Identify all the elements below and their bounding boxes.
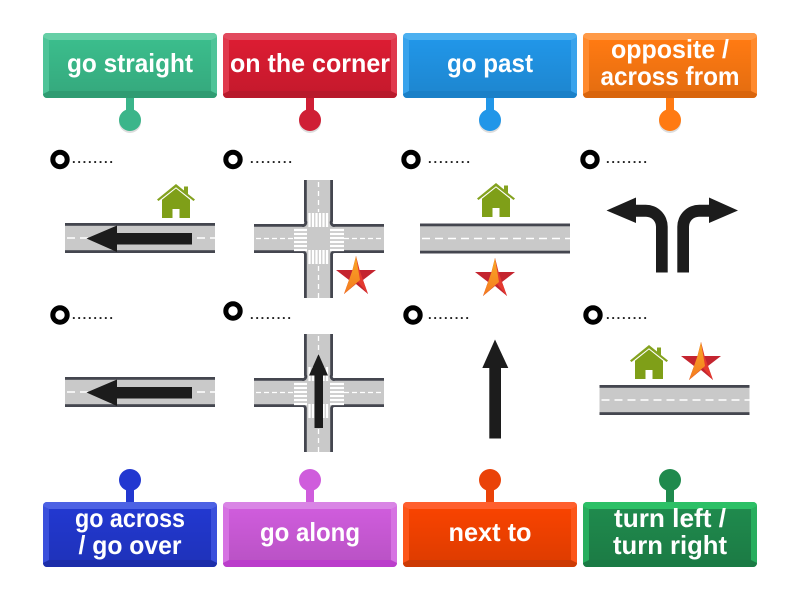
tile: go straight: go straight <box>67 48 193 78</box>
tile: turn left / turn right: turn right <box>613 530 727 560</box>
pin: opposite <box>659 98 681 133</box>
tile: opposite / across from <box>583 33 757 98</box>
tile: next to: next to <box>448 517 532 547</box>
tile: on the corner <box>223 33 397 98</box>
answer slot 7: ........ <box>428 307 469 322</box>
answer slot 7 <box>406 307 469 322</box>
tile: go past: go past <box>447 48 533 78</box>
tile: go straight <box>43 33 217 98</box>
answer slot 8 <box>586 307 647 322</box>
tile: turn left / turn right <box>583 502 757 567</box>
pin: turn left / right <box>659 469 681 502</box>
pin: go across <box>119 469 141 502</box>
icon: turn left and right arrows <box>606 198 738 272</box>
scene: crossroads with arrow across <box>254 334 384 452</box>
answer slot 3: ........ <box>428 151 470 166</box>
pin: go straight <box>119 98 141 133</box>
answer slot 2 <box>226 151 292 167</box>
tile: opposite / across from: across from <box>600 61 740 91</box>
answer slot 4 <box>583 151 647 167</box>
pin: on the corner <box>299 98 321 133</box>
tile: go along: go along <box>260 517 360 547</box>
tile: go across / go over: / go over <box>78 530 182 560</box>
answer slot 6 <box>226 304 291 322</box>
answer slot 6: ........ <box>250 307 291 322</box>
tile: go across / go over: go across <box>75 503 185 533</box>
tile: on the corner: on the corner <box>230 48 390 78</box>
answer slot 2: ........ <box>250 151 292 166</box>
answer slot 1: ........ <box>72 151 113 166</box>
tile: next to <box>403 502 577 567</box>
icon: straight up arrow <box>482 340 508 438</box>
tile: go along <box>223 502 397 567</box>
scene: road with house next to star <box>600 342 750 415</box>
answer slot 3 <box>404 151 470 167</box>
answer slot 5 <box>53 307 113 322</box>
pin: go past <box>479 98 501 133</box>
scene: road with arrow <box>65 377 215 407</box>
scene: road between house and star <box>420 183 570 296</box>
tile: opposite / across from: opposite / <box>611 34 729 64</box>
pin: go along <box>299 469 321 502</box>
pin: next to <box>479 469 501 502</box>
answer slot 5: ........ <box>72 307 113 322</box>
answer slot 8: ........ <box>606 307 647 322</box>
scene: crossroads with star on the corner <box>254 180 384 298</box>
tile: go past <box>403 33 577 98</box>
tile: go across / go over <box>43 502 217 567</box>
scene: road with arrow and house <box>65 184 215 253</box>
answer slot 4: ........ <box>606 151 647 166</box>
tile: turn left / turn right: turn left / <box>614 503 726 533</box>
answer slot 1 <box>53 151 113 167</box>
